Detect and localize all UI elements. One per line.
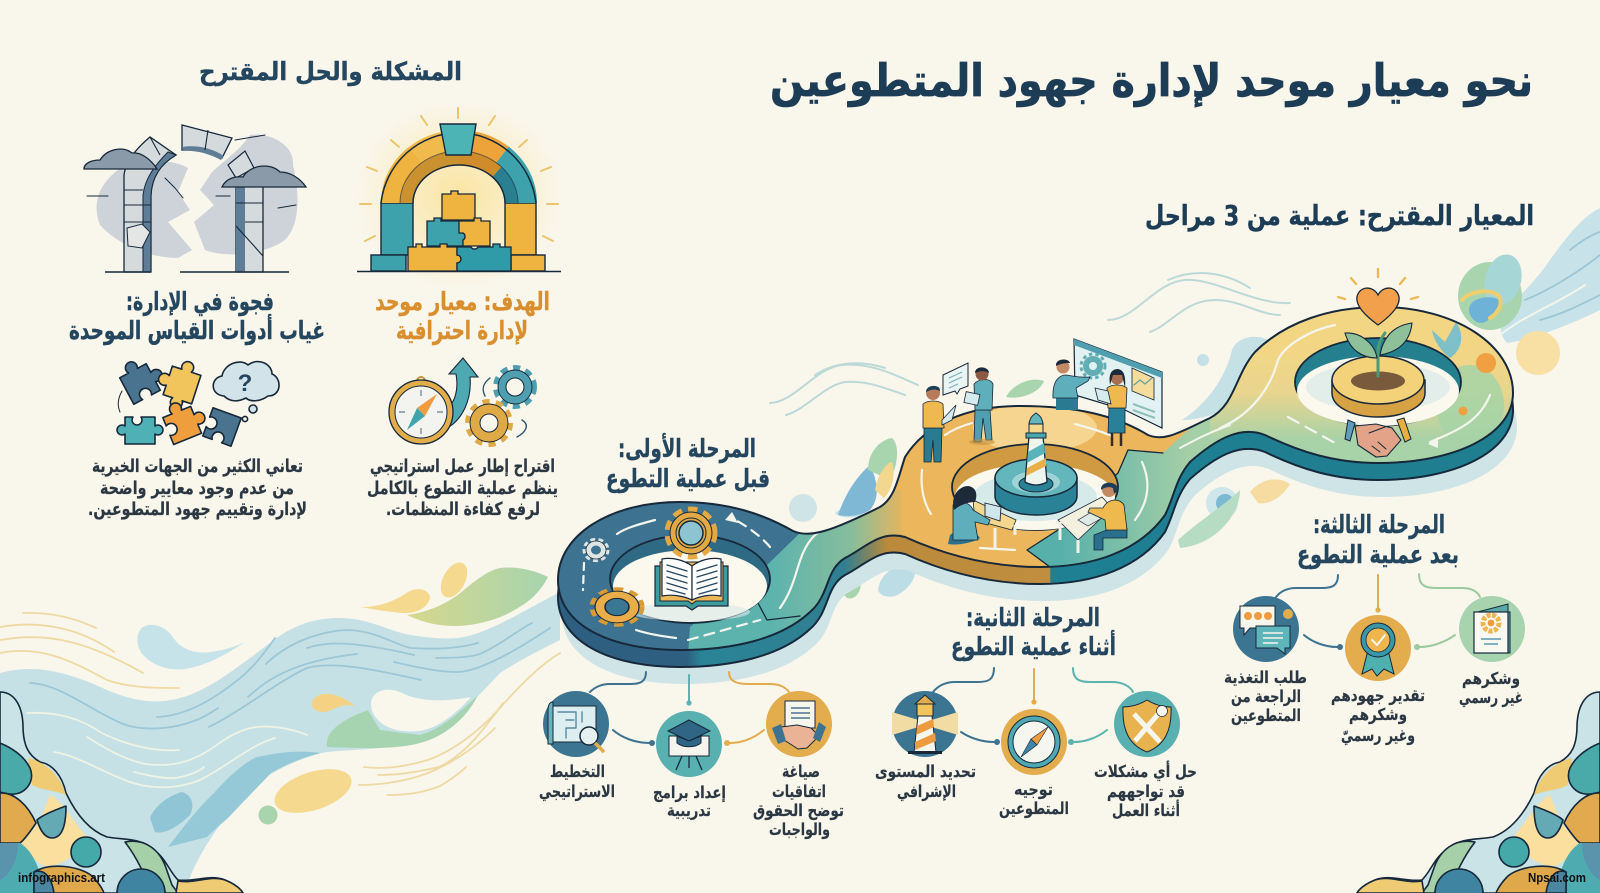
text: problem description: من عدم وجود معايير واضحة [100, 478, 294, 499]
stage 3 labels: طلب التغذية [1224, 668, 1307, 687]
stage 3 labels: وشكرهم [1349, 705, 1407, 725]
text: problem description: لإدارة وتقييم جهود المتطوعين. [88, 499, 307, 520]
stage 1 heading [606, 433, 770, 494]
stage 3 labels: الراجعة من [1231, 687, 1301, 707]
stage 3 heading: بعد عملية التطوع [1297, 540, 1459, 570]
text: solution description: اقتراح إطار عمل استراتيجي [370, 456, 555, 477]
stage 3 heading: المرحلة الثالثة: [1313, 510, 1445, 540]
stage 1 labels: التخطيط [550, 762, 605, 781]
stage 1 labels: والواجبات [769, 820, 830, 840]
stage 2 heading: المرحلة الثانية: [966, 603, 1100, 633]
stage 3 labels: وشكرهم [1462, 669, 1520, 689]
watermark: Npsai.com: Npsai.com [1528, 870, 1586, 885]
stage 1 labels: إعداد برامج [653, 783, 726, 803]
stage 2 labels: قد تواجههم [1107, 782, 1185, 802]
stage 2 labels: تحديد المستوى [875, 762, 976, 782]
stage 1 labels: تدريبية [667, 801, 711, 820]
watermark: infographics.art: infographics.art [18, 870, 106, 885]
text: problem description [88, 456, 307, 520]
bottom-left flowing wave [0, 558, 560, 893]
top-right wave and blobs [1458, 208, 1600, 375]
path side wall [558, 324, 1513, 667]
stage 2 labels: الإشرافي [897, 782, 956, 802]
icon: scattered puzzle pieces and question cloud [115, 351, 279, 446]
stage 1 labels: اتفاقيات [772, 782, 826, 801]
stage 3 labels: المتطوعين [1231, 706, 1301, 726]
text: problem description: تعاني الكثير من الجهات الخيرية [92, 456, 303, 477]
icon: handshake [1345, 418, 1411, 457]
icon: scattered puzzle pieces and question cloud: ? [238, 370, 252, 397]
stage 2 labels [875, 761, 1197, 820]
path shadow [562, 341, 1517, 684]
icon: strategic planning [543, 691, 609, 757]
icon: agreements [766, 691, 832, 757]
icon: open book [655, 558, 728, 610]
bottom-right corner blobs [1357, 692, 1600, 893]
heading: goal: لإدارة احترافية [396, 316, 528, 346]
stage 2 heading: أثناء عملية التطوع [951, 630, 1116, 662]
ring 2 hole [952, 444, 1118, 530]
icon: guidance compass [1001, 709, 1067, 775]
stage 1 labels: صياغة [782, 762, 820, 781]
stage 3 heading [1297, 510, 1459, 570]
icon: broken arch [84, 125, 306, 272]
heading: goal: الهدف: معيار موحد [375, 287, 550, 317]
stage 1 labels: الاستراتيجي [539, 782, 615, 802]
stage 1 connectors [590, 672, 789, 746]
presentation screen [1074, 339, 1162, 428]
heading: goal [375, 287, 550, 346]
subtitle: proposed standard: المعيار المقترح: عملية من 3 مراحل [1145, 200, 1534, 232]
presenter [1053, 360, 1090, 410]
stage 2 labels: توجيه [1014, 780, 1053, 800]
icon: training programs [656, 711, 722, 777]
icon: thank-you card [1459, 596, 1525, 662]
ring 1 hole [610, 535, 770, 623]
people discussing on ring 2 [923, 339, 1162, 553]
stage 2 heading [951, 603, 1116, 662]
stage 2 labels: أثناء العمل [1112, 800, 1180, 820]
icon: troubleshooting shield [1114, 691, 1180, 757]
three-stage journey path [540, 269, 1525, 684]
text: solution description [367, 456, 558, 520]
stage 2 labels: المتطوعين [999, 799, 1069, 819]
icon: supervision level lighthouse [892, 691, 958, 757]
stage 3 labels: غير رسمي [1459, 688, 1523, 708]
stage 3 labels: تقدير جهودهم [1331, 686, 1425, 706]
heading: management gap: فجوة في الإدارة: [126, 287, 274, 317]
icon: recognition rosette [1345, 615, 1411, 681]
stage 1 heading: المرحلة الأولى: [618, 433, 756, 464]
icon: big gold gear [668, 510, 714, 556]
stage 3 connectors [1276, 574, 1480, 650]
ring 3 hole [1295, 338, 1461, 426]
heading: management gap: غياب أدوات القياس الموحدة [69, 314, 325, 346]
stage 3 labels [1224, 668, 1523, 746]
text: solution description: ينظم عملية التطوع بالكامل [367, 478, 558, 499]
person in teal with speech bubble [943, 363, 995, 445]
heading: management gap [69, 287, 325, 346]
icon: compass, arrow and gears [389, 358, 534, 444]
person with tablet [923, 386, 956, 462]
stage 1 labels [539, 762, 844, 840]
stage 1 heading: قبل عملية التطوع [606, 464, 770, 494]
seated woman with laptop [948, 486, 1016, 548]
woman with tablet [1095, 369, 1127, 446]
icon: plant on disc [1332, 323, 1425, 417]
icon: heart with rays [1338, 269, 1418, 325]
heading: problem and solution: المشكلة والحل المقترح [199, 57, 462, 87]
bottom-left corner blobs [0, 692, 243, 893]
icon: small grey gear [585, 540, 607, 560]
decorative shapes around the path [770, 273, 1290, 601]
stage 2 connectors [933, 668, 1133, 745]
stage 3 labels: وغير رسميّ [1341, 726, 1415, 746]
text: solution description: لرفع كفاءة المنظمات. [386, 499, 540, 520]
icon: completed arch [354, 100, 564, 290]
icon: feedback bubbles [1233, 596, 1299, 662]
stage 2 labels: حل أي مشكلات [1094, 761, 1197, 782]
path top surface [559, 308, 1512, 649]
seated man at table [1058, 483, 1127, 553]
icon: lighthouse on disc [995, 413, 1077, 515]
icon: lying gold gear [593, 590, 641, 624]
stage 1 labels: توضح الحقوق [753, 801, 844, 821]
